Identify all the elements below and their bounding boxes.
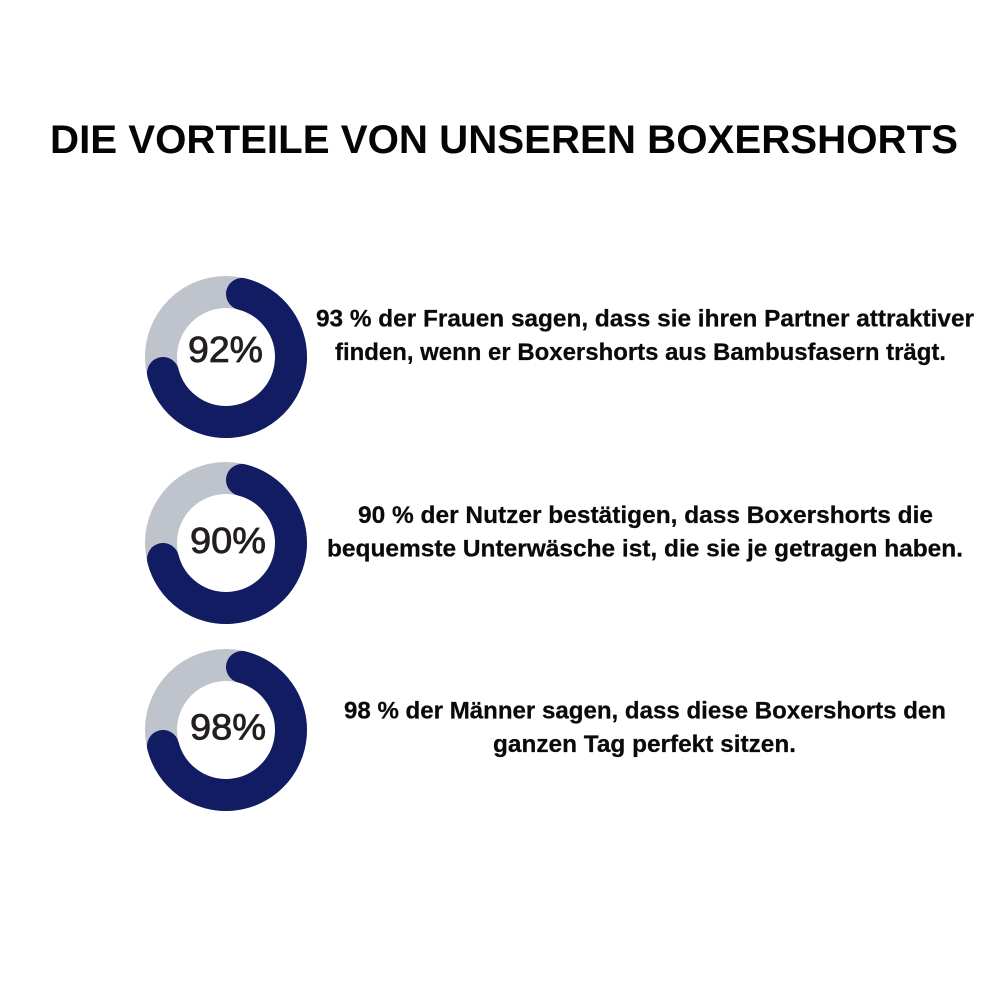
donut chart: 98%: 98% — [190, 706, 266, 748]
text block: statistic on women: finden, wenn er Boxershorts aus Bambusfasern trägt. — [335, 339, 946, 366]
text block: statistic on users: 90 % der Nutzer bestätigen, dass Boxershorts die — [358, 502, 933, 529]
donut chart: 90%: 90% — [190, 520, 266, 561]
donut chart: 98% — [161, 665, 291, 795]
text block: statistic on men: ganzen Tag perfekt sitzen. — [493, 731, 796, 758]
donut chart: 92% — [161, 292, 291, 422]
text block: statistic on men: 98 % der Männer sagen, dass diese Boxershorts den — [344, 698, 946, 724]
donut chart: 92%: 92% — [188, 329, 263, 370]
text block: statistic on men — [344, 698, 946, 758]
title: DIE VORTEILE VON UNSEREN BOXERSHORTS — [50, 118, 958, 162]
donut chart: 90% — [161, 478, 291, 608]
text block: statistic on users — [327, 502, 963, 562]
text block: statistic on women: 93 % der Frauen sagen, dass sie ihren Partner attraktiver — [316, 306, 974, 332]
text block: statistic on women — [316, 306, 974, 366]
text block: statistic on users: bequemste Unterwäsche ist, die sie je getragen haben. — [327, 536, 963, 562]
